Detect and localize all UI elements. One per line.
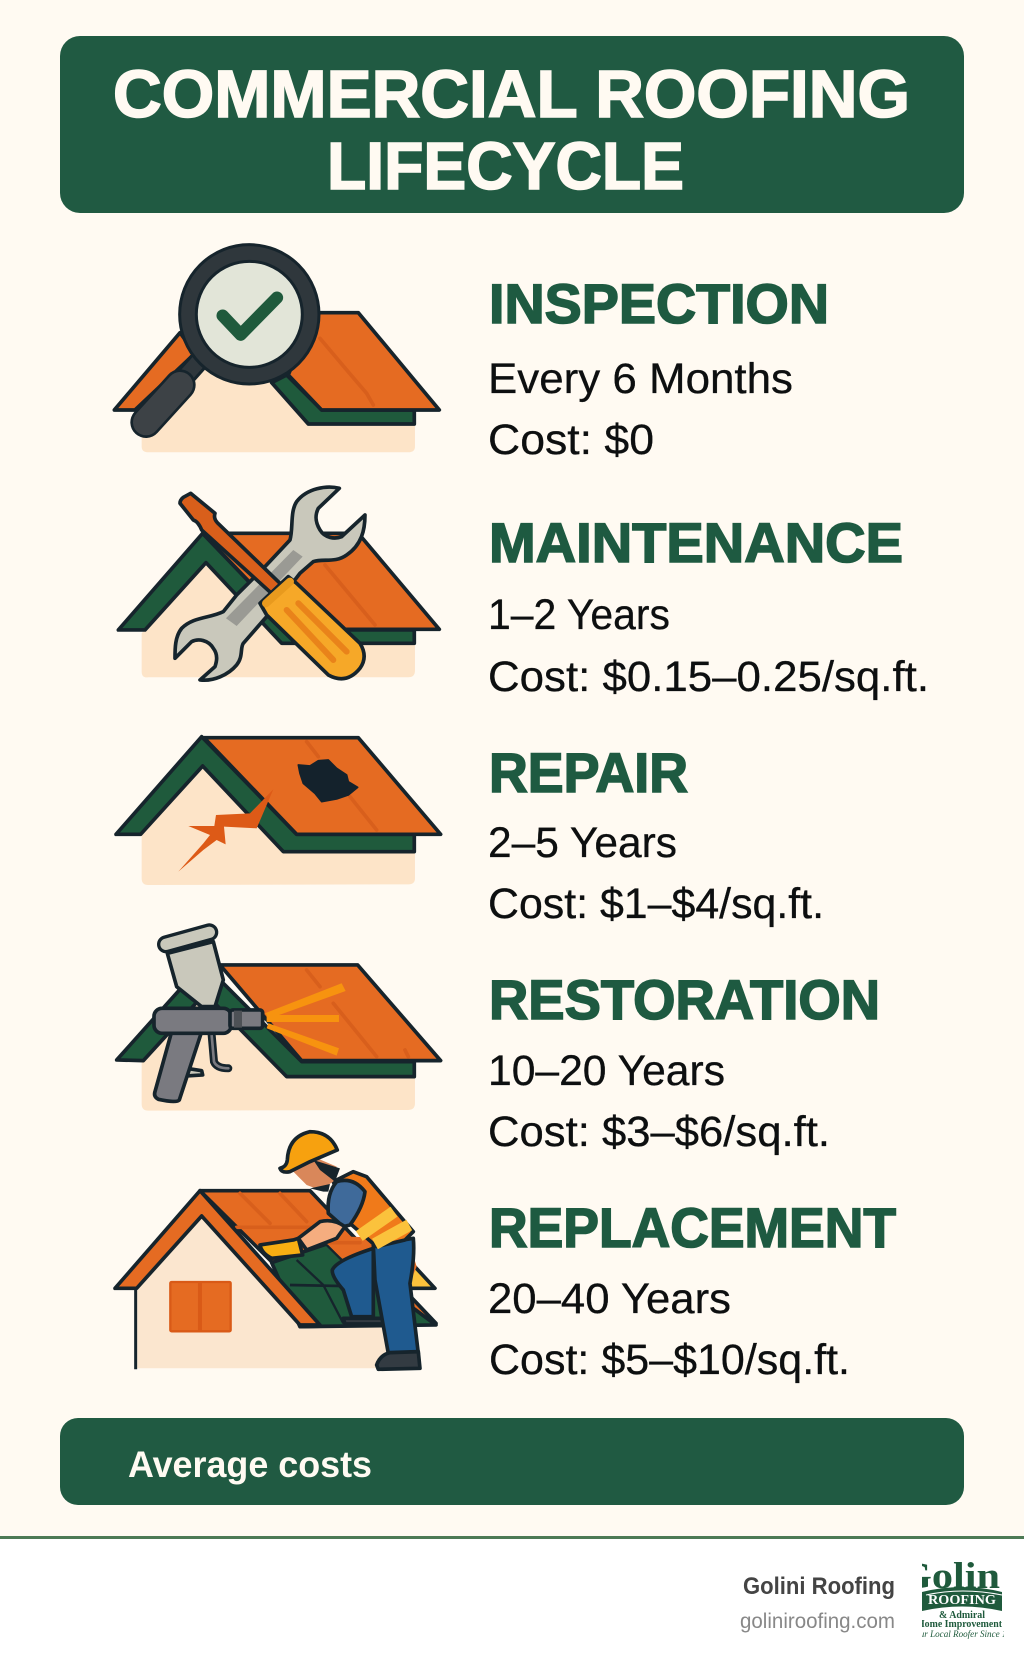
text: repair: Cost: $1–$4/sq.ft. (488, 880, 824, 928)
icon: inspection roof with magnifying glass (114, 245, 439, 452)
text: inspection: Cost: $0 (488, 416, 654, 464)
icon: replacement roof with worker (115, 1132, 436, 1369)
logo: ROOFING (928, 1593, 996, 1608)
icon: restoration roof with spray gun (117, 932, 441, 1111)
icon: window (170, 1282, 231, 1331)
logo (899, 1556, 1011, 1640)
text: restoration: Cost: $3–$6/sq.ft. (488, 1108, 830, 1156)
logo: & Admiral (939, 1610, 985, 1621)
title banner: LIFECYCLE (327, 129, 684, 204)
text: replacement (488, 1196, 896, 1384)
text: maintenance: 1–2 Years (488, 591, 670, 639)
icon: repair roof with hole and crack (116, 737, 441, 885)
footer website: goliniroofing.com (740, 1610, 895, 1633)
icon: spray (265, 983, 346, 1056)
average costs bar (60, 1418, 964, 1505)
text: restoration (488, 968, 880, 1156)
text: restoration: 10–20 Years (488, 1047, 725, 1095)
footer brand name: Golini Roofing (743, 1573, 895, 1600)
text: repair (488, 741, 824, 928)
icon: roof hole (298, 760, 358, 802)
footer (0, 1536, 1024, 1666)
text: maintenance (488, 511, 929, 701)
icon: wall crack (178, 789, 273, 872)
text: repair: REPAIR (489, 741, 688, 804)
text: restoration: RESTORATION (489, 968, 880, 1031)
text: replacement: 20–40 Years (488, 1275, 731, 1323)
title banner: COMMERCIAL ROOFING (113, 57, 910, 132)
text: replacement: REPLACEMENT (489, 1196, 896, 1259)
icon: spray gun (154, 932, 263, 1101)
text: inspection: Every 6 Months (488, 355, 793, 403)
text: inspection (488, 272, 829, 464)
average costs bar: Average costs (128, 1444, 372, 1485)
logo: Home Improvement (917, 1619, 1002, 1630)
text: maintenance: MAINTENANCE (489, 511, 903, 574)
icon: roofer (260, 1132, 420, 1369)
text: inspection: INSPECTION (489, 272, 829, 335)
text: repair: 2–5 Years (488, 819, 677, 867)
logo: Golin (899, 1556, 1000, 1597)
title banner (60, 36, 964, 213)
icon: maintenance roof with wrench and screwdriver (118, 487, 439, 680)
text: maintenance: Cost: $0.15–0.25/sq.ft. (488, 653, 929, 701)
text: replacement: Cost: $5–$10/sq.ft. (489, 1336, 850, 1384)
